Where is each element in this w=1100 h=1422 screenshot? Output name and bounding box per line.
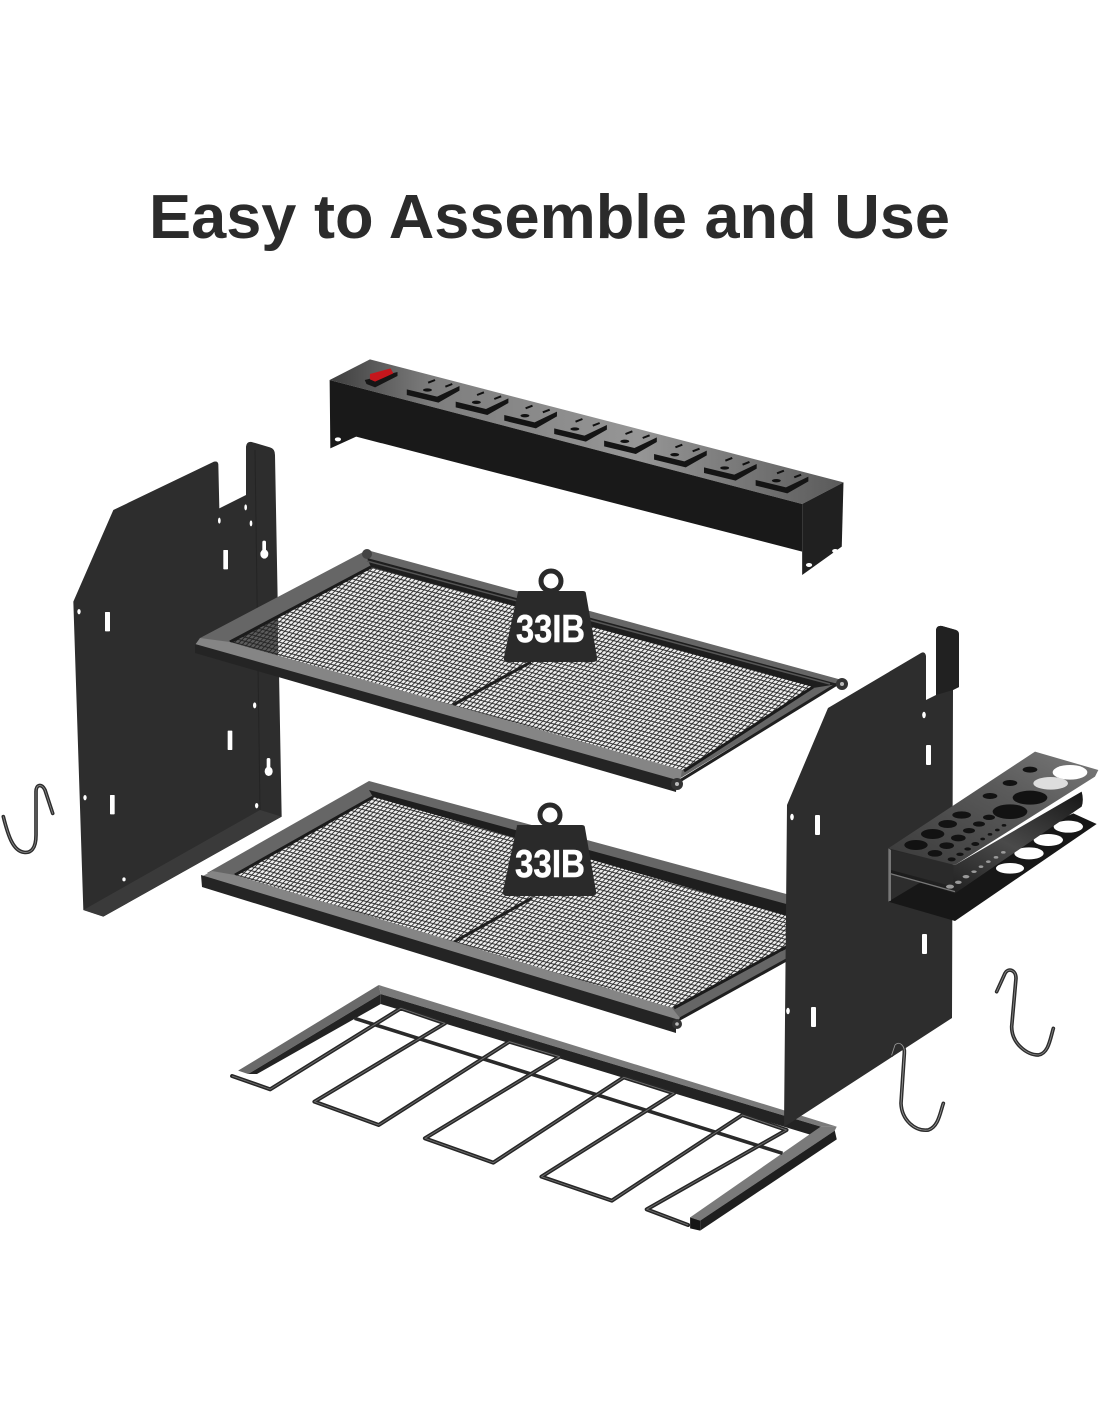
upper mesh shelf	[195, 549, 848, 792]
lower mesh shelf	[201, 781, 790, 1033]
wire battery rack	[232, 985, 837, 1231]
outlets row	[407, 380, 808, 493]
right side panel	[784, 626, 959, 1127]
weight badge: upper shelf 33IB	[504, 571, 597, 662]
icon: S hook lower right	[892, 1043, 943, 1130]
icon: red rocker switch	[365, 368, 397, 387]
icon: S hook upper right	[997, 970, 1053, 1055]
weight badge: upper shelf 33IB: 33IB	[516, 608, 585, 651]
title: Easy to Assemble and Use	[149, 183, 950, 252]
power strip	[330, 359, 843, 575]
icon: S hook left	[3, 786, 53, 852]
left side panel	[73, 442, 282, 917]
weight badge: lower shelf 33IB	[503, 805, 596, 896]
weight badge: lower shelf 33IB: 33IB	[515, 843, 585, 886]
tool holder bracket	[888, 752, 1098, 921]
